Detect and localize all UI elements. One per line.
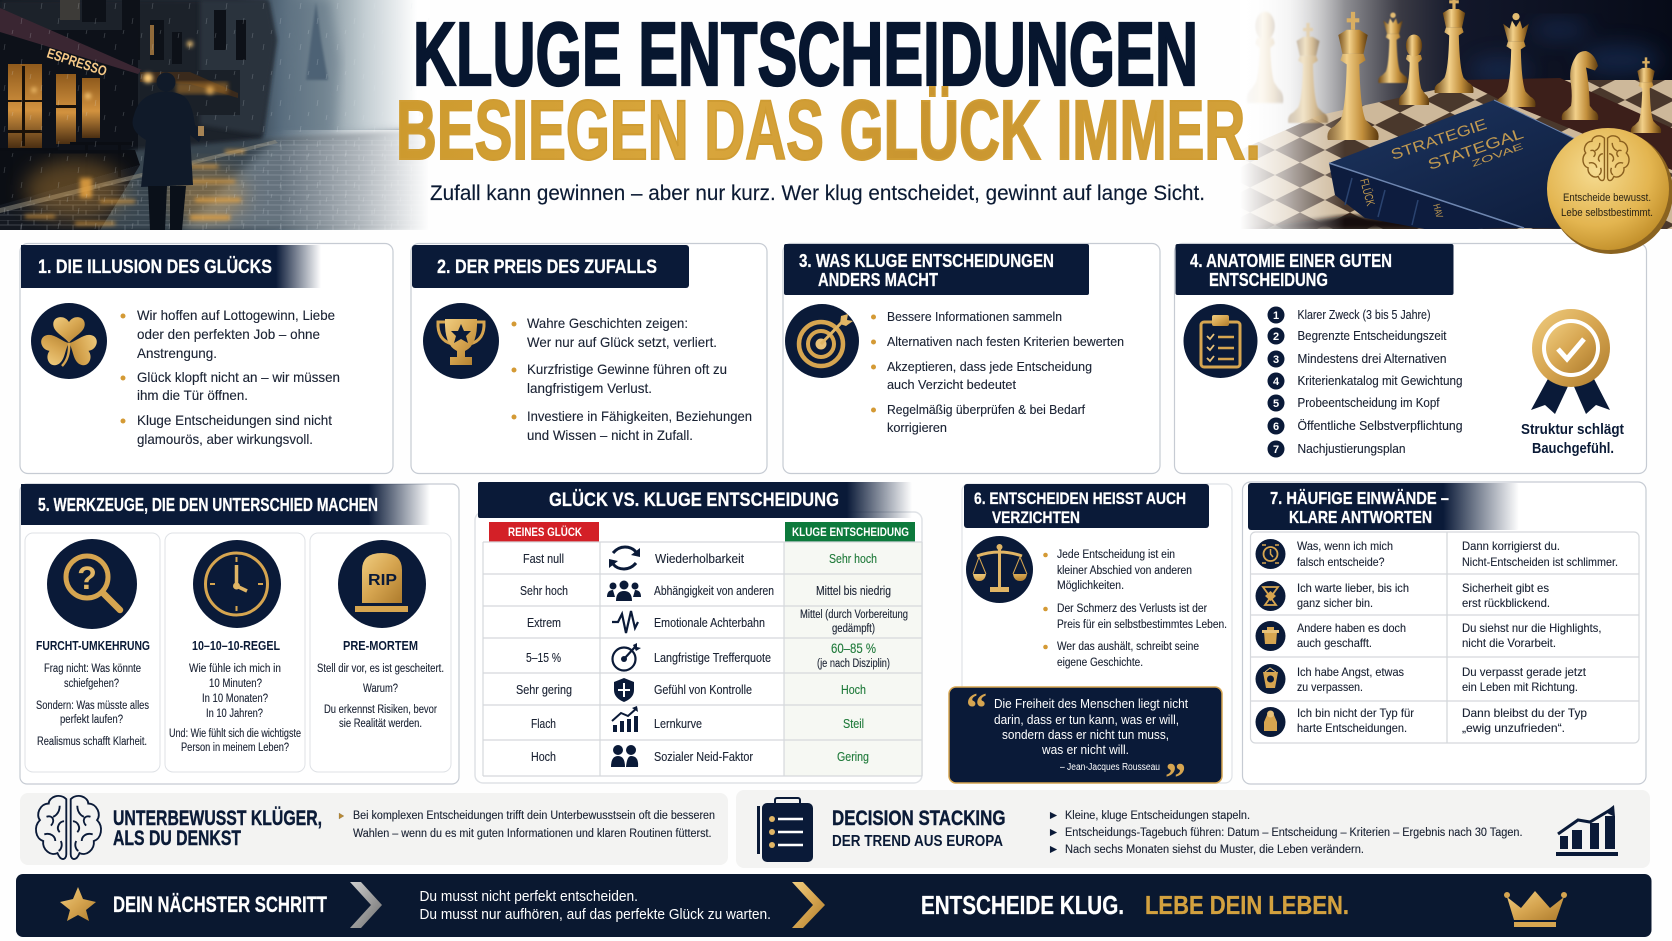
icon: strategy book: HAV — [1431, 203, 1446, 219]
heading: DER TREND AUS EUROPA — [832, 833, 1003, 850]
bullet list: Investiere in Fähigkeiten, Beziehungen — [527, 408, 752, 424]
bullet list: Regelmäßig überprüfen & bei Bedarf — [887, 402, 1085, 417]
bullet list: ihm die Tür öffnen. — [137, 387, 248, 403]
tool: Furcht-Umkehrung: Sondern: Was müsste alles — [36, 700, 149, 712]
icon: gravestone — [338, 540, 426, 628]
sign: espresso: ESPRESSO — [45, 45, 109, 79]
tool: 10-10-10-Regel: 10–10–10-REGEL — [192, 638, 280, 653]
column: reines Glück values: Sehr gering — [516, 683, 572, 697]
bullet list: oder den perfekten Job – ohne — [137, 326, 320, 342]
card 4: Anatomie einer guten Entscheidung — [1174, 244, 1646, 474]
title — [396, 5, 1261, 177]
bullet list: Anstrengung. — [137, 345, 217, 361]
bullet list: Jede Entscheidung ist ein — [1057, 549, 1175, 561]
bullet list — [871, 309, 1124, 435]
callout: quote: ” — [1165, 756, 1186, 802]
answers: Nicht-Entscheiden ist schlimmer. — [1462, 555, 1618, 569]
figure: man in coat — [132, 72, 203, 230]
tool: Furcht-Umkehrung: Frag nicht: Was könnte — [44, 663, 141, 675]
heading: ENTSCHEIDUNG — [1209, 270, 1328, 290]
objections — [1297, 539, 1414, 735]
card 7: häufige Einwände — [1242, 482, 1646, 784]
bullet list: Wer nur auf Glück setzt, verliert. — [527, 334, 717, 350]
bullet list — [512, 315, 752, 443]
card 2: der Preis des Zufalls — [411, 244, 767, 474]
column: kluge Entscheidung values: Steil — [843, 717, 864, 731]
callout: quote: – Jean-Jacques Rousseau — [1060, 762, 1160, 773]
column: criteria labels: Lernkurve — [654, 717, 702, 731]
callout: quote — [949, 686, 1222, 802]
bullet list: Wahre Geschichten zeigen: — [527, 315, 688, 331]
tool: Furcht-Umkehrung: Realismus schafft Klarheit. — [37, 736, 147, 748]
heading — [478, 482, 912, 518]
column: kluge Entscheidung values: Mittel bis niedrig — [816, 584, 891, 598]
bullet list: auch Verzicht bedeutet — [887, 377, 1016, 392]
photo: rainy street with man — [0, 0, 430, 230]
icon: target — [785, 304, 859, 378]
column: criteria labels: Wiederholbarkeit — [655, 552, 744, 566]
icon: star — [60, 887, 96, 921]
heading: 2. DER PREIS DES ZUFALLS — [437, 257, 657, 278]
hero banner — [0, 0, 1672, 230]
bullet list: Akzeptieren, dass jede Entscheidung — [887, 359, 1092, 374]
bullet list: Bessere Informationen sammeln — [887, 309, 1062, 324]
column: reines Glück values: 5–15 % — [526, 651, 561, 665]
bullet list: eigene Geschichte. — [1057, 657, 1143, 669]
answers: „ewig unzufrieden“. — [1462, 721, 1565, 735]
numbered list: 6 — [1273, 421, 1279, 433]
answers: erst rückblickend. — [1462, 596, 1550, 610]
tool: Pre-Mortem — [310, 533, 451, 772]
heading — [412, 245, 689, 288]
bullet list: Preis für ein selbstbestimmtes Leben. — [1057, 619, 1227, 631]
column: kluge Entscheidung values: gedämpft) — [832, 623, 875, 635]
arrow: gold chevron — [792, 882, 825, 928]
tool: 10-10-10-Regel: Wie fühle ich mich in — [189, 663, 281, 675]
title: BESIEGEN DAS GLÜCK IMMER. — [396, 83, 1261, 177]
callout: quote: Die Freiheit des Menschen liegt nicht — [994, 697, 1188, 711]
text: Wahlen – wenn du es mit guten Informationen und klaren Routinen fütterst. — [353, 828, 712, 840]
heading: DECISION STACKING — [832, 807, 1006, 830]
heading: 4. ANATOMIE EINER GUTEN — [1190, 251, 1392, 271]
numbered list: Mindestens drei Alternativen — [1298, 352, 1447, 366]
column: kluge Entscheidung values — [800, 552, 908, 764]
answers: nicht die Vorarbeit. — [1462, 636, 1556, 650]
column: kluge Entscheidung values: Hoch — [841, 683, 866, 697]
column: criteria labels: Abhängigkeit von anderen — [654, 584, 774, 598]
bullet list: korrigieren — [887, 420, 947, 435]
heading: 1. DIE ILLUSION DES GLÜCKS — [38, 257, 272, 278]
callout: quote: was er nicht will. — [1041, 743, 1129, 757]
bullet list: Glück klopft nicht an – wir müssen — [137, 369, 340, 385]
tag: kluge Entscheidung — [785, 522, 915, 542]
text: Bei komplexen Entscheidungen trifft dein Unterbewusstsein oft die besseren — [353, 810, 715, 822]
motto: Struktur schlägt — [1521, 422, 1624, 438]
bullet list — [1050, 810, 1522, 856]
card 1: die Illusion des Glücks — [20, 244, 393, 474]
heading — [1176, 244, 1454, 295]
seal: Lebe selbstbestimmt. — [1561, 207, 1653, 219]
column: reines Glück values: Hoch — [531, 750, 556, 764]
card 6: Entscheiden heißt auch verzichten — [949, 484, 1232, 802]
icon: brain — [36, 796, 101, 859]
column: criteria labels: Emotionale Achterbahn — [654, 616, 765, 630]
card 3: was kluge Entscheidungen anders macht — [783, 244, 1160, 474]
slogan — [921, 890, 1349, 920]
heading: 3. WAS KLUGE ENTSCHEIDUNGEN — [799, 251, 1054, 271]
heading: 7. HÄUFIGE EINWÄNDE – — [1270, 488, 1449, 508]
column: kluge Entscheidung values: Sehr hoch — [829, 552, 877, 566]
column: kluge Entscheidung values: Gering — [837, 750, 869, 764]
icon: strategy book: FLÜCK — [1357, 177, 1378, 208]
tool: Furcht-Umkehrung — [25, 533, 160, 772]
row icons — [1256, 539, 1286, 737]
icon: strategy book: STRATEGIE — [1389, 116, 1489, 164]
icon: strategy book: STATEGAL — [1426, 125, 1526, 174]
objections: ganz sicher bin. — [1297, 596, 1373, 610]
tool: 10-10-10-Regel — [165, 533, 305, 772]
numbered list — [1268, 306, 1463, 458]
bullet list: kleiner Abschied von anderen — [1057, 565, 1192, 577]
heading: ANDERS MACHT — [818, 270, 938, 290]
bullet list: Nach sechs Monaten siehst du Muster, die Leben verändern. — [1065, 844, 1364, 856]
column: kluge Entscheidung values: (je nach Disziplin) — [817, 658, 890, 670]
bullet list: langfristigem Verlust. — [527, 380, 652, 396]
band: unterbewusst klüger — [20, 793, 728, 865]
comparison table: Glück vs. kluge Entscheidung — [475, 482, 922, 783]
heading — [832, 807, 1006, 850]
tool: Pre-Mortem: Du erkennst Risiken, bevor — [324, 704, 437, 716]
icon: gravestone: RIP — [368, 572, 397, 589]
bullet list: Entscheidungs-Tagebuch führen: Datum – Entscheidung – Kriterien – Ergebnis nach 30 Tagen. — [1065, 827, 1522, 839]
bullet list: Alternativen nach festen Kriterien bewerten — [887, 334, 1124, 349]
tool: 10-10-10-Regel: 10 Minuten? — [209, 678, 262, 690]
numbered list: Kriterienkatalog mit Gewichtung — [1298, 374, 1463, 388]
slogan: LEBE DEIN LEBEN. — [1145, 890, 1349, 920]
column: criteria labels: Gefühl von Kontrolle — [654, 683, 752, 697]
bullet list: Kurzfristige Gewinne führen oft zu — [527, 361, 727, 377]
objections: Was, wenn ich mich — [1297, 539, 1393, 553]
answers: Dann bleibst du der Typ — [1462, 706, 1587, 720]
bullet list: Der Schmerz des Verlusts ist der — [1057, 603, 1207, 615]
column: criteria labels — [654, 552, 774, 764]
icon: trophy — [423, 303, 499, 379]
tool: Pre-Mortem: sie Realität werden. — [339, 718, 422, 730]
answers: Sicherheit gibt es — [1462, 581, 1549, 595]
card 5: Werkzeuge — [20, 484, 459, 784]
column: criteria labels: Langfristige Trefferquote — [654, 651, 771, 665]
callout: quote: “ — [966, 686, 987, 732]
numbered list: Klarer Zweck (3 bis 5 Jahre) — [1298, 308, 1430, 322]
tool: Furcht-Umkehrung: perfekt laufen? — [60, 714, 123, 726]
tool: 10-10-10-Regel: In 10 Jahren? — [206, 708, 263, 720]
icon: checklist — [757, 798, 813, 862]
slogan: ENTSCHEIDE KLUG. — [921, 890, 1124, 920]
band: decision stacking — [736, 790, 1650, 868]
column: reines Glück values: Sehr hoch — [520, 584, 568, 598]
objections: auch geschafft. — [1297, 636, 1372, 650]
numbered list: 4 — [1273, 376, 1280, 388]
heading: 5. WERKZEUGE, DIE DEN UNTERSCHIED MACHEN — [38, 494, 378, 515]
bullet list: Kluge Entscheidungen sind nicht — [137, 412, 332, 428]
heading — [21, 484, 430, 525]
text: next step: Du musst nur aufhören, auf das perfekte Glück zu warten. — [420, 907, 771, 923]
heading — [113, 807, 322, 850]
answers: Dann korrigierst du. — [1462, 539, 1560, 553]
column: reines Glück values — [516, 552, 572, 764]
answers: Du verpasst gerade jetzt — [1462, 665, 1587, 679]
tag: reines Glück — [489, 522, 599, 542]
icon: growth chart — [1556, 805, 1618, 856]
column: reines Glück values: Extrem — [527, 616, 561, 630]
answers — [1462, 539, 1618, 735]
objections: falsch entscheide? — [1297, 555, 1385, 569]
text — [339, 810, 715, 840]
bullet list — [1043, 549, 1227, 669]
bullet list: Möglichkeiten. — [1057, 580, 1124, 592]
objections: Ich habe Angst, etwas — [1297, 665, 1404, 679]
photo: chess pieces and book — [1240, 0, 1672, 230]
tag: reines Glück: REINES GLÜCK — [508, 524, 582, 539]
text: next step: Du musst nicht perfekt entscheiden. — [420, 889, 638, 905]
heading: GLÜCK VS. KLUGE ENTSCHEIDUNG — [549, 488, 839, 511]
icon: magnifier — [47, 539, 137, 629]
bullet list: Wer das aushält, schreibt seine — [1057, 641, 1199, 653]
numbered list: Probeentscheidung im Kopf — [1298, 396, 1440, 410]
icon: clipboard — [1184, 304, 1258, 378]
motto — [1521, 422, 1624, 457]
tool: Furcht-Umkehrung: schiefgehen? — [64, 678, 119, 690]
icon: clover — [31, 303, 107, 379]
heading: UNTERBEWUSST KLÜGER, — [113, 807, 322, 830]
column: reines Glück values: Fast null — [523, 552, 564, 566]
objections: zu verpassen. — [1297, 680, 1363, 694]
heading — [784, 244, 1089, 295]
arrow: grey chevron — [350, 882, 382, 928]
icon: magnifier: ? — [77, 560, 97, 596]
column: kluge Entscheidung values: 60–85 % — [831, 641, 876, 656]
heading: dein nächster Schritt: DEIN NÄCHSTER SCHRITT — [113, 892, 327, 917]
objections: Ich bin nicht der Typ für — [1297, 706, 1414, 720]
callout: quote: darin, dass er tun kann, was er will, — [994, 713, 1179, 727]
icon: scales — [966, 536, 1033, 603]
heading — [21, 245, 321, 288]
tool: Pre-Mortem: PRE-MORTEM — [343, 638, 418, 653]
column: criteria icons — [607, 547, 641, 767]
heading: KLARE ANTWORTEN — [1289, 507, 1432, 527]
text: next step — [420, 889, 771, 923]
numbered list: 5 — [1273, 398, 1279, 410]
tool: 10-10-10-Regel: Person in meinem Leben? — [181, 742, 289, 754]
bullet list: Kleine, kluge Entscheidungen stapeln. — [1065, 810, 1250, 822]
numbered list: Öffentliche Selbstverpflichtung — [1298, 419, 1463, 433]
heading — [1248, 483, 1519, 530]
icon: strategy book: ZOVAE — [1470, 141, 1524, 169]
objections: Ich warte lieber, bis ich — [1297, 581, 1409, 595]
heading: VERZICHTEN — [992, 508, 1080, 527]
icon: strategy book — [1328, 100, 1574, 229]
heading: 6. ENTSCHEIDEN HEISST AUCH — [974, 489, 1186, 508]
column: criteria labels: Sozialer Neid-Faktor — [654, 750, 753, 764]
callout: quote: sondern dass er nicht tun muss, — [1002, 728, 1169, 742]
icon: medal — [1531, 309, 1610, 414]
tool: 10-10-10-Regel: In 10 Monaten? — [202, 693, 268, 705]
numbered list: 1 — [1273, 310, 1279, 322]
heading: ALS DU DENKST — [113, 827, 241, 850]
subtitle: Zufall kann gewinnen – aber nur kurz. Wer klug entscheidet, gewinnt auf lange Sicht. — [430, 181, 1205, 205]
motto: Bauchgefühl. — [1532, 441, 1614, 457]
numbered list: 7 — [1273, 444, 1279, 456]
tool: 10-10-10-Regel: Und: Wie fühlt sich die wichtigste — [169, 728, 301, 740]
seal — [1547, 128, 1672, 254]
call to action bar — [16, 874, 1652, 937]
bullet list: und Wissen – nicht in Zufall. — [527, 427, 693, 443]
answers: ein Leben mit Richtung. — [1462, 680, 1578, 694]
seal: Entscheide bewusst. — [1563, 192, 1651, 204]
icon: crown — [1504, 891, 1567, 927]
numbered list: 2 — [1273, 331, 1279, 343]
objections table — [1250, 532, 1639, 743]
objections: Andere haben es doch — [1297, 621, 1406, 635]
bullet list: Wir hoffen auf Lottogewinn, Liebe — [137, 307, 335, 323]
icon: brain — [1583, 136, 1629, 181]
heading — [964, 484, 1209, 528]
answers: Du siehst nur die Highlights, — [1462, 621, 1602, 635]
tool: Pre-Mortem: Warum? — [363, 683, 398, 695]
objections: harte Entscheidungen. — [1297, 721, 1407, 735]
numbered list: 3 — [1273, 354, 1279, 366]
icon: clock — [193, 540, 281, 628]
column: kluge Entscheidung values: Mittel (durch Vorbereitung — [800, 609, 908, 621]
title: KLUGE ENTSCHEIDUNGEN — [413, 5, 1198, 105]
bullet list: glamourös, aber wirkungsvoll. — [137, 431, 313, 447]
numbered list: Nachjustierungsplan — [1298, 442, 1406, 456]
tool: Pre-Mortem: Stell dir vor, es ist gescheitert. — [317, 663, 444, 675]
numbered list: Begrenzte Entscheidungszeit — [1298, 329, 1447, 343]
column: reines Glück values: Flach — [531, 717, 556, 731]
tool: Furcht-Umkehrung: FURCHT-UMKEHRUNG — [36, 638, 150, 653]
bullet list — [120, 307, 340, 447]
tag: kluge Entscheidung: KLUGE ENTSCHEIDUNG — [792, 525, 909, 539]
